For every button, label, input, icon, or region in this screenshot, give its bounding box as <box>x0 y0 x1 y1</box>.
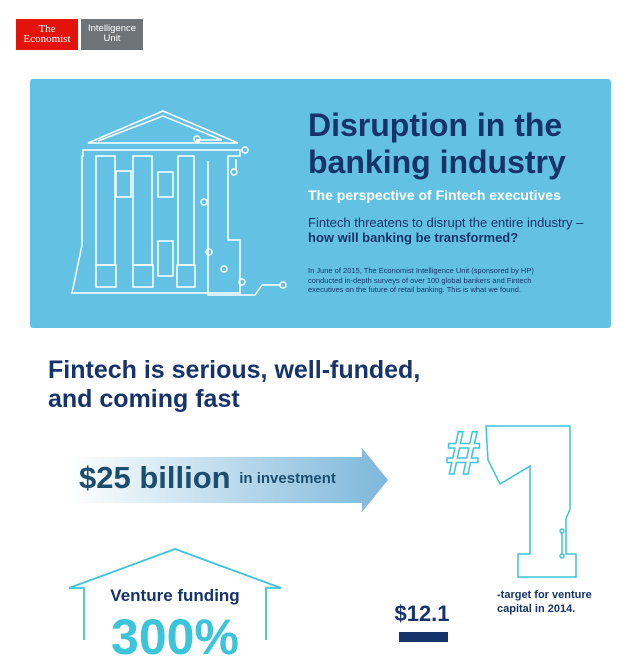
logo: economist <box>16 19 78 50</box>
logo: economist: Economist <box>23 33 71 45</box>
bar: $12.1: $12.1 <box>394 601 450 626</box>
logo: intelligence unit: Intelligence <box>88 23 136 34</box>
panel: header <box>30 79 611 328</box>
title: Disruption in the <box>308 107 562 143</box>
section heading <box>48 356 420 413</box>
intro text: Fintech threatens to disrupt the entire industry – <box>308 215 583 230</box>
logo: economist: The <box>38 23 56 35</box>
caption: #1 target: capital in 2014. <box>497 603 575 615</box>
icon: house venture funding <box>68 548 282 665</box>
intro text: how will banking be transformed? <box>308 230 518 245</box>
stat: $25 billion: $25 billion in investment <box>79 460 336 495</box>
title <box>308 107 566 180</box>
stat: 300%: 300% <box>111 609 239 665</box>
caption: #1 target: -target for venture <box>497 589 592 601</box>
bar: $12.1 <box>394 601 450 642</box>
section heading: and coming fast <box>48 385 240 413</box>
methodology note: In June of 2015, The Economist Intelligence Unit (sponsored by HP) conducted in-depth surveys of over 100 global bankers and Fintech executives on the future of retail banking. This is what we found. <box>308 266 534 294</box>
icon: #1 outline <box>446 424 577 578</box>
logo: intelligence unit <box>81 19 143 50</box>
title: banking industry <box>308 144 566 180</box>
icon: circuit bank building <box>71 110 287 296</box>
section heading: Fintech is serious, well-funded, <box>48 356 420 384</box>
logo <box>16 19 143 50</box>
arrow: investment <box>79 448 388 512</box>
logo: intelligence unit: Unit <box>104 33 120 44</box>
subtitle: The perspective of Fintech executives <box>308 187 561 203</box>
intro text <box>308 215 584 245</box>
label: venture funding: Venture funding <box>110 586 240 605</box>
caption: #1 target <box>497 589 592 615</box>
